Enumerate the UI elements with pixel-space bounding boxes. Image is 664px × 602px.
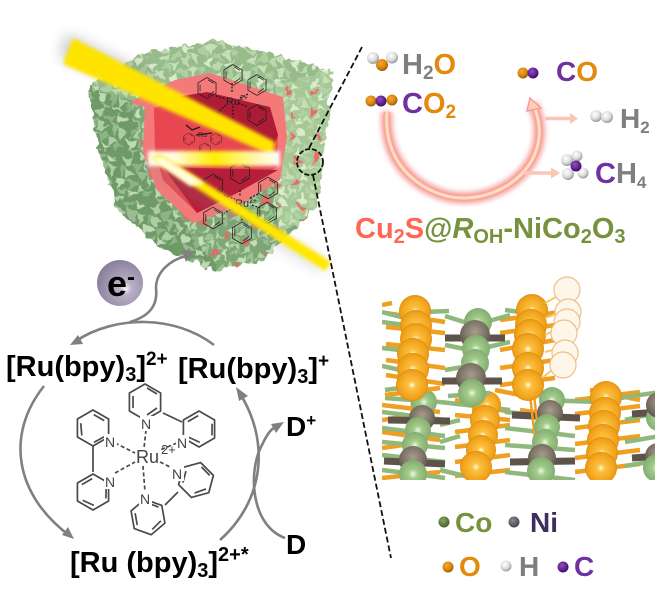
dashed zoom lines and circle xyxy=(297,47,391,558)
cube faces with flakes xyxy=(88,40,333,270)
molecule: Ru complex middle: Ru xyxy=(198,132,207,139)
label: Ru(bpy)3 2+: [Ru(bpy) xyxy=(6,351,125,383)
title: catalyst formula: 3 xyxy=(614,226,626,248)
legend: C: C xyxy=(574,551,594,582)
title: catalyst formula: S xyxy=(405,213,424,245)
molecule: Ru(bpy)3 structure: 2+ xyxy=(161,442,176,457)
label: CH4: 4 xyxy=(637,173,647,192)
lower layer columns xyxy=(399,381,655,480)
label: CO2: 2 xyxy=(446,102,456,123)
electron ball: e xyxy=(107,263,127,304)
label: Ru(bpy)3 +: [Ru(bpy) xyxy=(178,353,297,385)
label: Ru(bpy)3 2+*: ] xyxy=(208,547,218,579)
label: Ru(bpy)3 2+*: 2+* xyxy=(218,544,249,566)
cube hollow interior xyxy=(130,73,287,223)
title: catalyst formula: @R xyxy=(424,213,473,245)
molecule: Ru complex top: Ru xyxy=(226,96,240,108)
legend: Ni: Ni xyxy=(530,507,558,538)
label: H2 xyxy=(590,103,650,137)
molecule: Ru complex top: 2+ xyxy=(240,95,248,102)
label: Ru(bpy)3 2+: 2+ xyxy=(146,349,168,370)
label: H2O: 2 xyxy=(423,63,434,84)
molecule: Ru(bpy)3 structure: N xyxy=(141,416,151,432)
title: catalyst formula: O xyxy=(592,213,614,245)
label: H2: H xyxy=(620,103,640,134)
label: Ru(bpy)3 2+*: [Ru (bpy) xyxy=(70,547,197,579)
label: CH4: CH xyxy=(595,158,637,190)
title: catalyst formula: OH xyxy=(473,226,503,248)
label: Ru(bpy)3 +: + xyxy=(318,351,329,372)
arrow: cycle right xyxy=(220,387,259,540)
molecule: Ru(bpy)3 structure: N xyxy=(140,491,150,507)
panel: Cu2S@ROH-NiCo2O3 hollow cube xyxy=(60,34,333,272)
legend: O xyxy=(442,551,481,582)
pink cycle arrow xyxy=(387,98,541,198)
legend: H xyxy=(500,551,539,582)
crystal structure xyxy=(382,277,664,488)
molecule: Ru(bpy)3 structure: N xyxy=(105,474,115,490)
title: catalyst formula: 2 xyxy=(581,226,592,248)
legend: Co xyxy=(438,507,492,538)
title: catalyst formula: 2 xyxy=(394,226,405,248)
arrow: electron transfer to cube xyxy=(130,250,194,322)
label: CO2: CO xyxy=(402,88,446,120)
molecule: Ru complex top xyxy=(198,65,266,125)
label: Ru(bpy)3 2+: 3 xyxy=(125,364,136,386)
molecule: Ru complex bottom: 2+ xyxy=(249,198,257,205)
molecule: Ru(bpy)3 structure xyxy=(70,384,222,537)
label: Ru(bpy)3 2+: ] xyxy=(136,351,146,383)
legend: C xyxy=(558,551,594,582)
label: D+: + xyxy=(306,411,316,430)
electron ball: - xyxy=(127,264,135,291)
adsorbed white atoms xyxy=(542,277,581,378)
legend: O: O xyxy=(459,551,481,582)
arrow: cycle left xyxy=(20,386,74,539)
title: catalyst formula: -NiCo xyxy=(503,213,581,245)
molecule: Ru(bpy)3 structure: N xyxy=(177,435,187,451)
upper layer bonds xyxy=(382,303,560,396)
legend: Co: Co xyxy=(455,507,492,538)
label: D: D xyxy=(286,529,306,560)
label: CO xyxy=(518,56,598,87)
legend: H: H xyxy=(519,551,539,582)
label: H2O: O xyxy=(434,49,456,81)
molecule: Ru(bpy)3 structure: N xyxy=(172,466,182,482)
label: D+: D xyxy=(286,411,306,442)
arrow: to CH4 xyxy=(524,168,560,178)
label: Ru(bpy)3 +: 3 xyxy=(297,366,308,388)
upper layer atoms xyxy=(396,294,548,407)
arrow: cycle top xyxy=(70,322,214,345)
molecule: Ru(bpy)3 structure: Ru xyxy=(136,447,159,467)
arrow: donor xyxy=(254,422,285,538)
label: H2: 2 xyxy=(640,118,650,137)
molecule: Ru complex bottom: Ru xyxy=(235,198,249,210)
molecule: Ru complex middle xyxy=(184,125,221,155)
electron ball xyxy=(97,260,143,306)
label: H2O xyxy=(367,49,456,84)
label: CO: CO xyxy=(556,56,598,87)
molecule: Ru complex bottom xyxy=(204,162,277,244)
label: H2O: H xyxy=(402,49,423,81)
label: Ru(bpy)3 2+*: 3 xyxy=(197,560,208,582)
legend xyxy=(438,507,594,582)
molecule: Ru(bpy)3 structure: N xyxy=(105,434,115,450)
label: CO2 xyxy=(366,88,456,123)
lower layer bonds xyxy=(382,390,660,480)
label: Ru(bpy)3 +: ] xyxy=(308,353,318,385)
title: catalyst formula: Cu xyxy=(355,213,394,245)
light beams xyxy=(60,34,331,272)
label: CH4 xyxy=(561,150,647,192)
legend: Ni xyxy=(508,507,558,538)
arrow: to H2 xyxy=(545,113,578,124)
